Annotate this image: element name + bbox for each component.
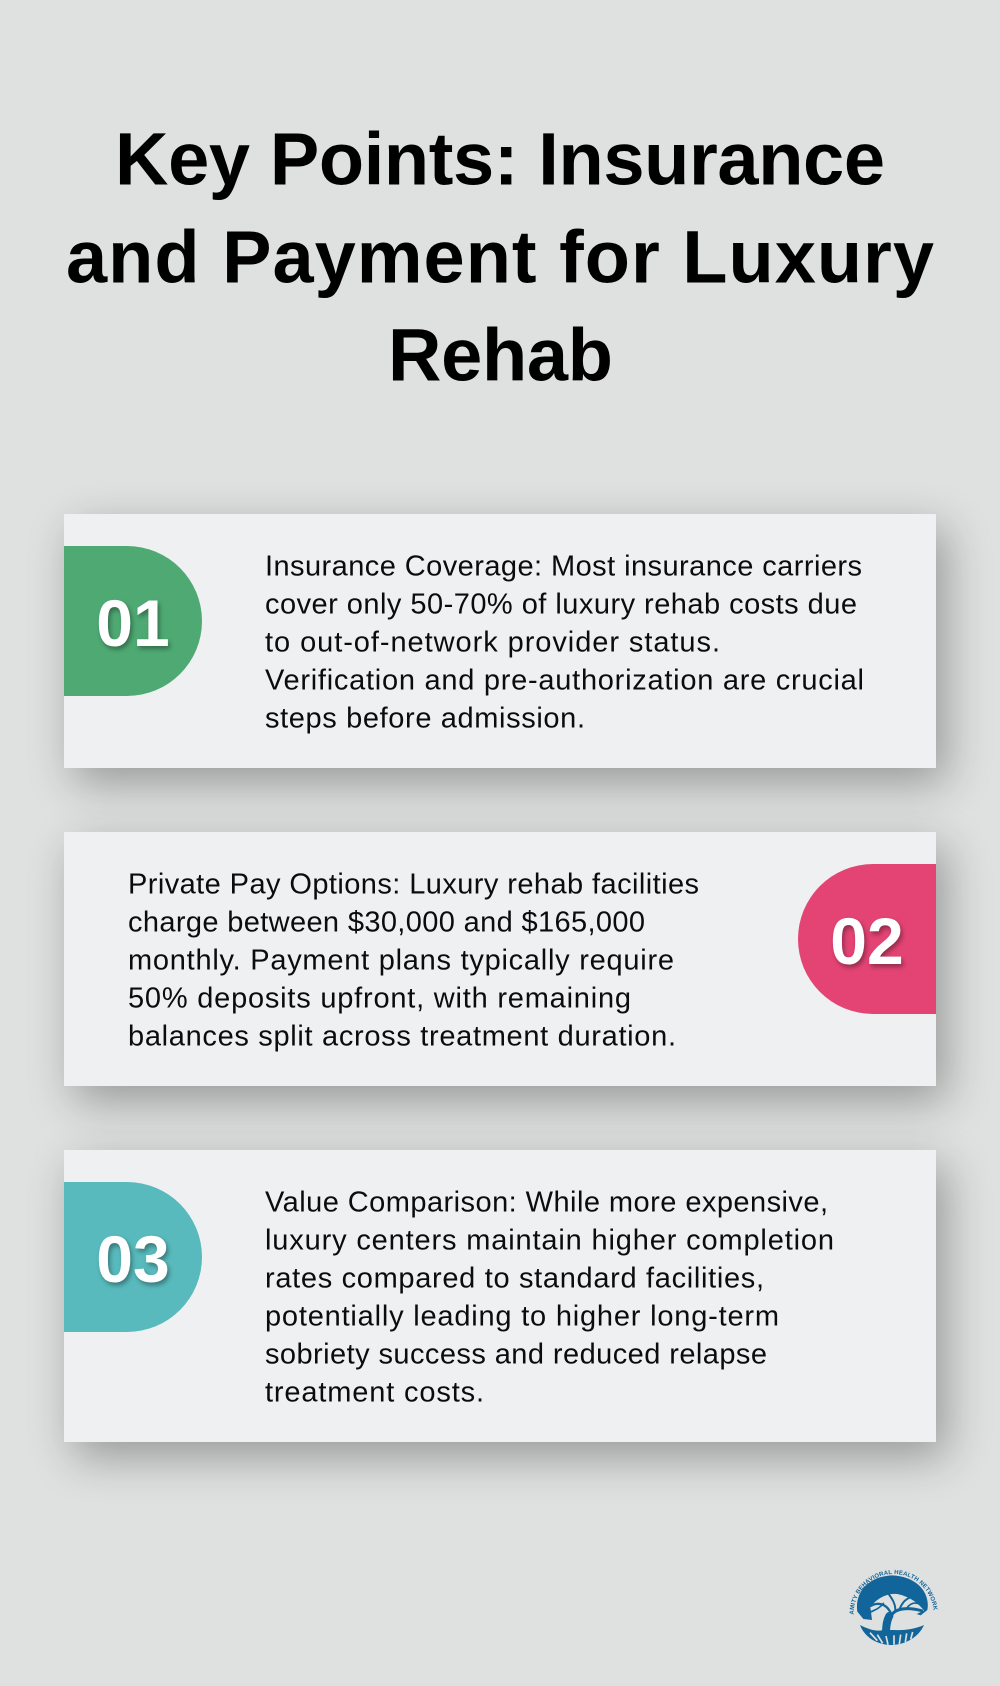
badge: 03: 03 <box>96 1222 170 1296</box>
text: insurance coverage: steps before admission. <box>265 702 585 734</box>
panel: private pay options <box>64 832 936 1086</box>
text: insurance coverage <box>265 550 864 734</box>
text: value comparison: rates compared to standard facilities, <box>265 1262 764 1294</box>
badge: 02: 02 <box>830 904 904 978</box>
panel: insurance coverage <box>64 514 936 768</box>
text: value comparison: treatment costs. <box>265 1376 484 1408</box>
text: private pay options: Private Pay Options: Luxury rehab facilities <box>128 868 698 900</box>
text: private pay options: 50% deposits upfront, with remaining <box>128 982 630 1014</box>
title: Rehab <box>388 314 613 396</box>
text: insurance coverage: Verification and pre-authorization are crucial <box>265 664 864 696</box>
text: value comparison: luxury centers maintain higher completion <box>265 1224 834 1256</box>
text: insurance coverage: cover only 50-70% of luxury rehab costs due <box>265 588 857 620</box>
text: private pay options: charge between $30,000 and $165,000 <box>128 906 644 938</box>
panel: value comparison <box>64 1150 936 1442</box>
title: Key Points: Insurance <box>115 118 885 200</box>
icon: Amity Behavioral Health Network logo: AMITY BEHAVIORAL HEALTH NETWORK <box>850 1570 938 1614</box>
text: insurance coverage: Insurance Coverage: Most insurance carriers <box>265 550 862 582</box>
badge: 01: 01 <box>96 586 170 660</box>
title: and Payment for Luxury <box>66 216 934 298</box>
text: private pay options <box>128 868 698 1052</box>
text: value comparison <box>265 1186 834 1408</box>
text: value comparison: potentially leading to higher long-term <box>265 1300 779 1332</box>
icon: Amity Behavioral Health Network logo <box>850 1570 938 1645</box>
text: private pay options: monthly. Payment plans typically require <box>128 944 674 976</box>
badge: 01 <box>64 546 202 696</box>
text: insurance coverage: to out-of-network provider status. <box>265 626 720 658</box>
text: private pay options: balances split across treatment duration. <box>128 1020 676 1052</box>
text: value comparison: Value Comparison: While more expensive, <box>265 1186 828 1218</box>
title <box>66 118 934 396</box>
text: value comparison: sobriety success and reduced relapse <box>265 1338 767 1370</box>
badge: 02 <box>798 864 936 1014</box>
badge: 03 <box>64 1182 202 1332</box>
